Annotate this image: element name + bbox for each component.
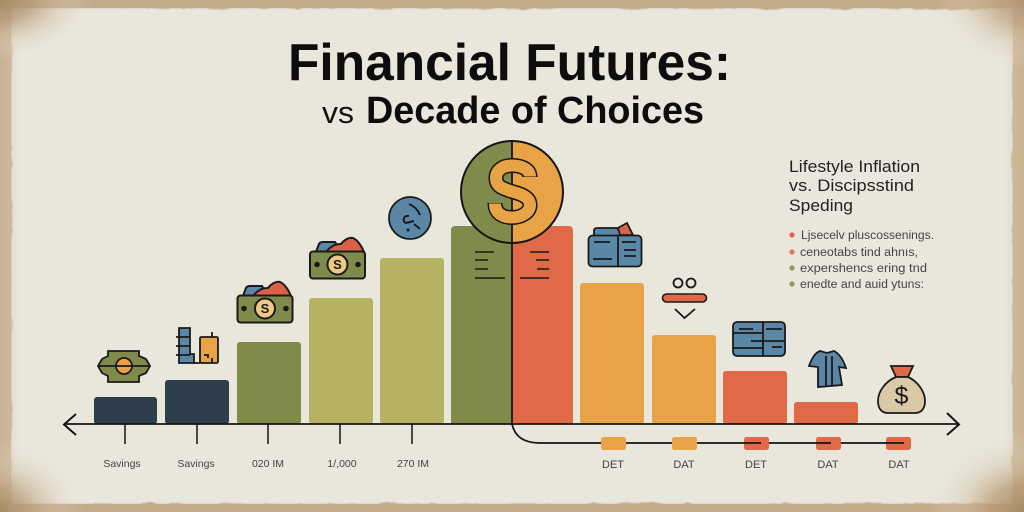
icon: lines on the central bars bbox=[475, 252, 549, 278]
side bullet list: expershencs ering tnd bbox=[800, 263, 927, 275]
icon: money bag: $ bbox=[895, 382, 909, 410]
axis labels: right: DET bbox=[602, 459, 624, 471]
icon: money bag bbox=[878, 366, 925, 413]
lower timeline with chips bbox=[512, 424, 911, 450]
icon: cash wallet bbox=[310, 238, 365, 278]
axis labels: left: Savings bbox=[177, 458, 215, 470]
title bbox=[288, 34, 731, 132]
x axis with arrows bbox=[64, 413, 959, 435]
icon: central split dollar coin bbox=[461, 141, 563, 424]
icon: cash wallet: S bbox=[333, 257, 342, 272]
bar chart: savings growth bars bbox=[94, 226, 512, 424]
axis labels: left: 020 IM bbox=[252, 458, 284, 470]
icon: face with dash and chevron bbox=[662, 278, 706, 318]
icon: cash wallet bbox=[238, 282, 292, 322]
icon: blue wallet with red tag bbox=[588, 223, 642, 267]
icon: blue circle badge bbox=[389, 197, 431, 239]
title: vs bbox=[322, 95, 354, 130]
axis labels: right: DAT bbox=[817, 459, 839, 471]
bar chart: lifestyle spending bars bbox=[512, 226, 858, 424]
axis labels: left: 270 IM bbox=[397, 458, 429, 470]
side bullet list: enedte and auid ytuns: bbox=[800, 279, 924, 291]
side bullet list bbox=[789, 230, 934, 291]
side heading: Lifestyle Inflation bbox=[789, 158, 920, 176]
side bullet list: Ljsecelv pluscossenings. bbox=[801, 230, 934, 242]
side heading: vs. Discipsstind bbox=[789, 177, 914, 195]
title: Financial Futures: bbox=[288, 34, 731, 92]
side bullet list: ceneotabs tind ahnıs, bbox=[800, 247, 918, 259]
side heading: Speding bbox=[789, 197, 853, 215]
axis labels: left: 1/,000 bbox=[327, 458, 357, 470]
axis ticks bbox=[125, 424, 412, 444]
title: Decade of Choices bbox=[366, 90, 704, 132]
icon: green banknote bbox=[98, 351, 150, 382]
axis labels: left: Savings bbox=[103, 458, 141, 470]
axis labels: right: DAT bbox=[888, 459, 910, 471]
axis labels: left bbox=[103, 458, 429, 470]
axis labels: right: DET bbox=[745, 459, 767, 471]
icon: cash wallet: S bbox=[261, 301, 270, 316]
side heading bbox=[789, 158, 920, 215]
icon: blue shirt bbox=[809, 351, 846, 387]
axis labels: right: DAT bbox=[673, 459, 695, 471]
icon: buildings bbox=[176, 328, 218, 363]
icon: blue card bbox=[733, 322, 785, 356]
axis labels: right bbox=[602, 459, 910, 471]
